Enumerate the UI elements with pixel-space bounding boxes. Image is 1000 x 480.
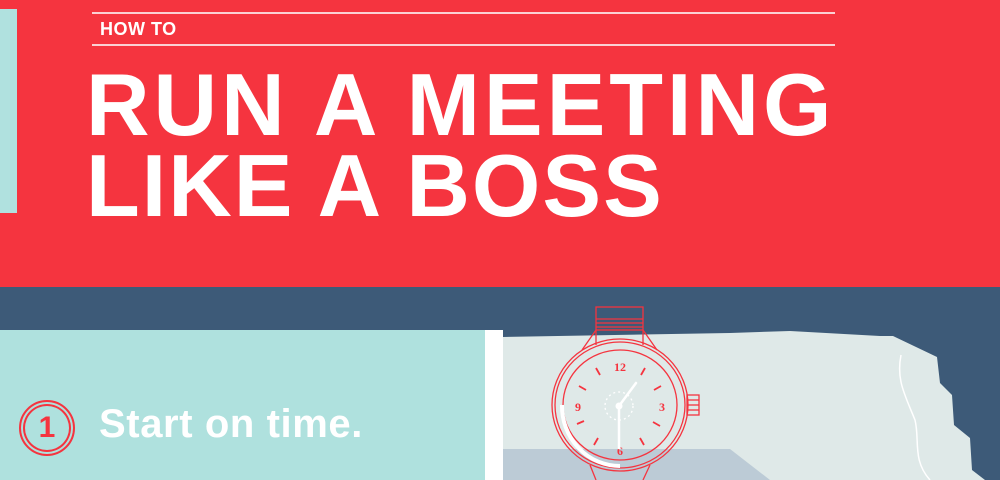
icon: number 1 badge: 1 bbox=[39, 411, 55, 444]
kicker: how to bbox=[92, 12, 835, 46]
arm bbox=[503, 331, 985, 480]
teal accent bar bbox=[0, 9, 17, 213]
icon: watch bbox=[552, 307, 699, 480]
illustration: arm with watch: 9 bbox=[575, 400, 581, 414]
title: LIKE A BOSS bbox=[86, 136, 664, 235]
panel: step 1 bbox=[0, 330, 485, 480]
white divider strip bbox=[485, 330, 503, 480]
title bbox=[86, 55, 835, 235]
illustration: arm with watch: 12 bbox=[614, 360, 626, 374]
illustration: arm with watch: 6 bbox=[617, 444, 623, 458]
icon: number 1 badge bbox=[19, 400, 75, 456]
title: RUN A MEETING bbox=[86, 55, 835, 154]
kicker: how to: HOW TO bbox=[100, 19, 177, 39]
header panel bbox=[0, 0, 1000, 287]
illustration: arm with watch: 3 bbox=[659, 400, 665, 414]
step text: Start on time. bbox=[99, 402, 363, 446]
